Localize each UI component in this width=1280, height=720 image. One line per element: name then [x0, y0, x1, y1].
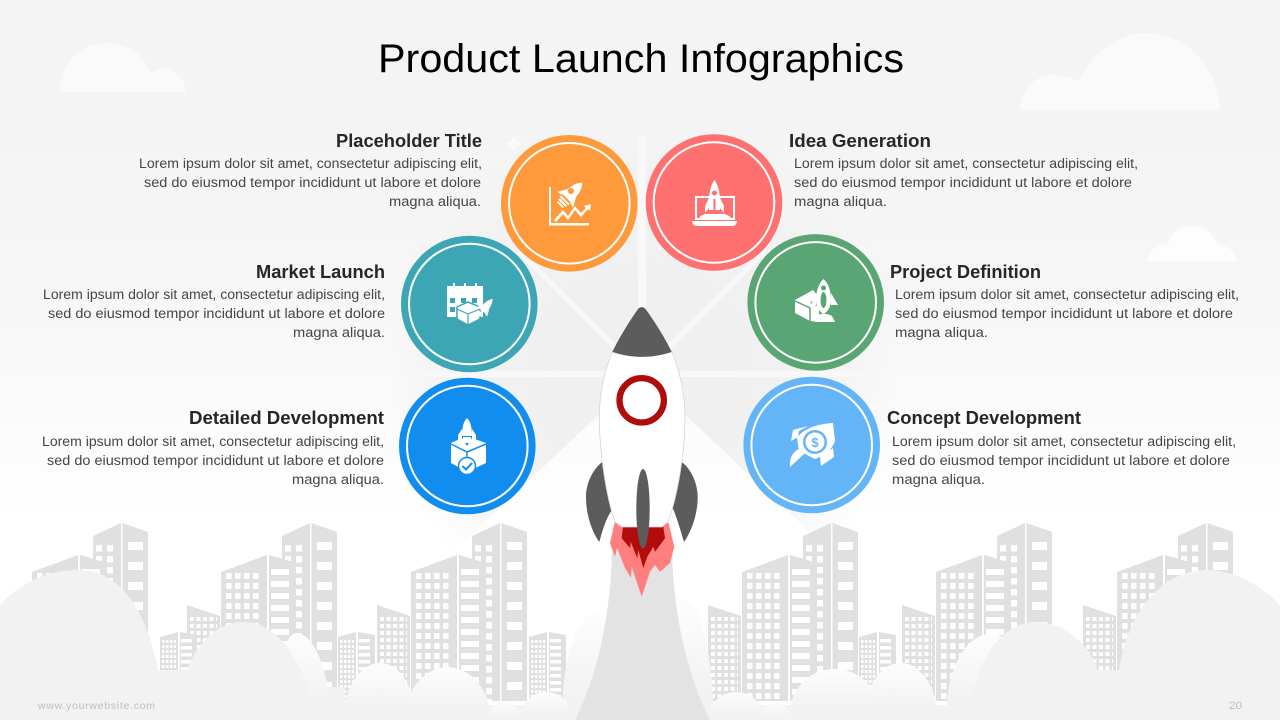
sparkle — [505, 135, 523, 152]
text block: Idea Generation: Lorem ipsum dolor sit amet, consectetur adipiscing elit, — [794, 156, 1138, 171]
flame inner — [622, 527, 665, 568]
icon: rocket on box with check — [451, 418, 486, 474]
text block: Market Launch: Lorem ipsum dolor sit amet, consectetur adipiscing elit, — [43, 287, 385, 302]
icon: rocket launching from laptop — [692, 180, 737, 226]
text block: Placeholder Title — [139, 131, 482, 209]
flame outer — [610, 522, 674, 597]
top-right cloud — [1020, 33, 1220, 110]
text block: Market Launch — [43, 262, 385, 340]
rocket — [586, 307, 698, 597]
text block: Market Launch: magna aliqua. — [293, 325, 385, 340]
text block: Concept Development: sed do eiusmod tempor incididunt ut labore et dolore — [892, 453, 1230, 468]
text block: Concept Development: Lorem ipsum dolor sit amet, consectetur adipiscing elit, — [892, 434, 1236, 449]
rocket smoke trail — [575, 540, 710, 720]
text block: Detailed Development: Detailed Development — [189, 408, 384, 428]
icon: calendar with parcel and rocket — [447, 283, 498, 325]
text block: Detailed Development: Lorem ipsum dolor sit amet, consectetur adipiscing elit, — [42, 434, 384, 449]
text block: Idea Generation: Idea Generation — [789, 131, 931, 151]
badge: orange rocket growth — [501, 135, 638, 272]
text block: Placeholder Title: Placeholder Title — [336, 131, 482, 151]
text block: Placeholder Title: sed do eiusmod tempor incididunt ut labore et dolore — [144, 175, 481, 190]
text block: Detailed Development: magna aliqua. — [292, 472, 384, 487]
badge: light blue money rocket — [743, 377, 880, 513]
rocket body — [599, 351, 685, 527]
text block: Detailed Development: sed do eiusmod tempor incididunt ut labore et dolore — [47, 453, 384, 468]
page number: 20 — [1229, 700, 1242, 712]
mid-right cloud — [1147, 226, 1237, 261]
text block: Placeholder Title: Lorem ipsum dolor sit amet, consectetur adipiscing elit, — [139, 156, 482, 171]
badge: teal calendar — [401, 236, 538, 372]
text block: Concept Development — [887, 408, 1236, 487]
text block: Idea Generation: sed do eiusmod tempor incididunt ut labore et dolore — [794, 175, 1132, 190]
center fin — [636, 469, 650, 548]
text block: Project Definition: Project Definition — [890, 262, 1041, 282]
badge: blue package — [399, 378, 536, 514]
text block: Project Definition: Lorem ipsum dolor sit amet, consectetur adipiscing elit, — [895, 287, 1239, 302]
icon: rocket over growth chart — [549, 175, 591, 226]
ground clouds — [0, 570, 1280, 720]
text block: Project Definition: magna aliqua. — [895, 325, 988, 340]
text block: Concept Development: Concept Development — [887, 408, 1081, 428]
right fin — [673, 462, 698, 542]
city skyline — [32, 523, 1233, 701]
rocket nose — [612, 307, 672, 357]
icon: dollar rocket: $ — [811, 435, 819, 450]
badge: green box and rocket — [747, 234, 884, 371]
title: Product Launch Infographics — [378, 37, 904, 81]
text block: Market Launch: Market Launch — [256, 262, 385, 282]
top-left cloud — [60, 43, 186, 92]
light ray fan behind rocket — [390, 114, 894, 600]
porthole — [620, 378, 664, 422]
icon: box and rocket — [795, 279, 838, 322]
text block: Project Definition — [890, 262, 1239, 340]
text block: Idea Generation — [789, 131, 1138, 209]
text block: Detailed Development — [42, 408, 384, 487]
text block: Concept Development: magna aliqua. — [892, 472, 985, 487]
text block: Market Launch: sed do eiusmod tempor incididunt ut labore et dolore — [48, 306, 385, 321]
badge: red laptop rocket — [646, 134, 782, 271]
text block: Project Definition: sed do eiusmod tempor incididunt ut labore et dolore — [895, 306, 1233, 321]
left fin — [586, 462, 612, 542]
footer website: www.yourwebsite.com — [37, 700, 155, 712]
text block: Idea Generation: magna aliqua. — [794, 194, 887, 209]
text block: Placeholder Title: magna aliqua. — [389, 194, 481, 209]
